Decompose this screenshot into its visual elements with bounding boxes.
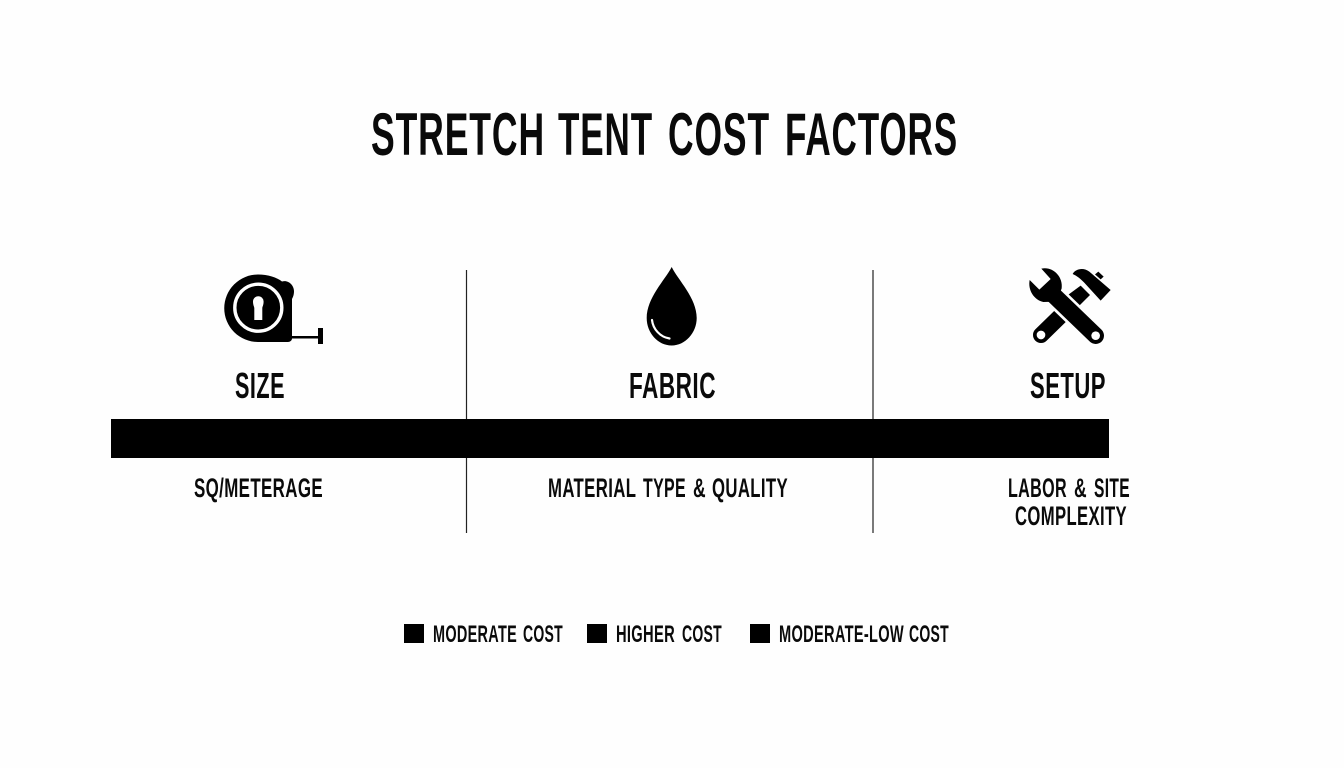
description: fabric: QUALITY [712, 473, 788, 503]
legend item: moderate cost: COST [523, 621, 563, 648]
description: setup: & [1074, 473, 1087, 503]
title: COST [668, 101, 770, 168]
heading: size: SIZE [235, 365, 285, 406]
horizontal cost bar [111, 419, 1109, 458]
description: fabric: & [693, 473, 706, 503]
description: fabric: TYPE [643, 473, 686, 503]
description: setup: LABOR [1008, 473, 1067, 503]
legend item: moderate-low cost: MODERATE-LOW [779, 621, 904, 648]
description: setup: COMPLEXITY [1015, 501, 1127, 531]
icon: wrench and hammer [1029, 268, 1111, 340]
description: setup: SITE [1094, 473, 1130, 503]
panel: fabric [548, 267, 788, 503]
legend item: higher cost: HIGHER [616, 621, 675, 648]
description: fabric: MATERIAL [548, 473, 636, 503]
icon: fabric drop [647, 267, 697, 346]
legend item: moderate-low cost: COST [909, 621, 949, 648]
description: setup [1008, 473, 1130, 531]
legend [404, 621, 949, 648]
panel: setup [1008, 268, 1130, 531]
title: FACTORS [785, 101, 958, 168]
panel: size [194, 274, 323, 503]
legend item: moderate cost: MODERATE [433, 621, 517, 648]
heading: fabric: FABRIC [629, 365, 716, 406]
legend item: higher cost: COST [682, 621, 722, 648]
heading: setup: SETUP [1030, 365, 1106, 406]
title: STRETCH [371, 101, 545, 168]
description: size: SQ/METERAGE [194, 473, 323, 503]
icon: tape measure [224, 274, 323, 344]
title: TENT [558, 101, 653, 168]
